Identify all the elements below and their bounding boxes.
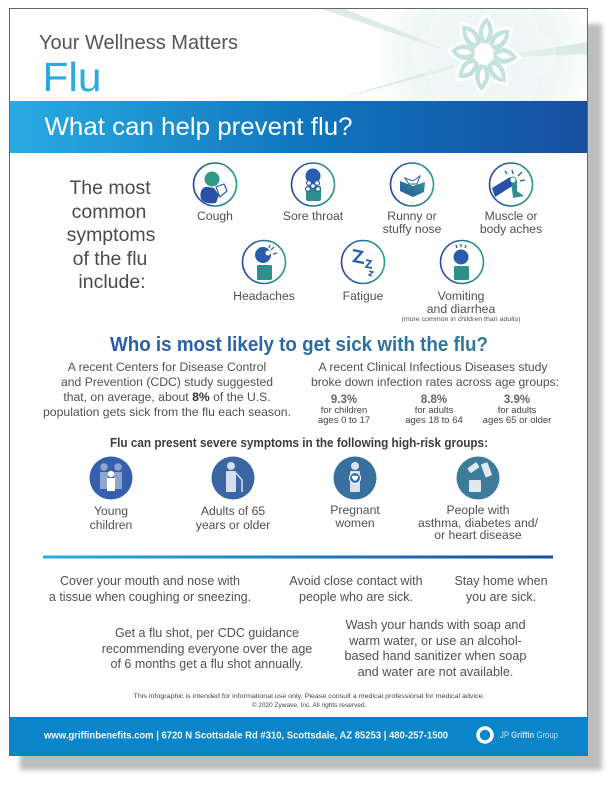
footer band	[10, 717, 587, 755]
label: chronic conditions: People with	[446, 503, 510, 517]
tip: flu shot: Get a flu shot, per CDC guidance	[115, 626, 299, 640]
label: vomiting	[402, 289, 520, 323]
text block: CDC study: A recent Centers for Disease Control	[68, 360, 266, 374]
label: muscle aches: Muscle or	[485, 209, 537, 223]
tip: wash hands: based hand sanitizer when soap	[345, 649, 526, 663]
symptoms intro text: common	[72, 201, 146, 223]
stat: adults 65 or older: ages 65 or older	[483, 415, 551, 426]
label: young children: children	[90, 518, 132, 532]
label: headaches: Headaches	[233, 289, 295, 303]
tip: wash hands: and water are not available.	[358, 665, 513, 679]
label: young children	[90, 504, 132, 532]
text block: CDC study: and Prevention (CDC) study suggested	[61, 375, 273, 389]
tip: cover mouth	[49, 574, 251, 604]
main title: Flu	[42, 54, 102, 100]
label: older adults	[196, 504, 270, 532]
label: chronic conditions: asthma, diabetes and/	[418, 516, 539, 530]
label: older adults: years or older	[196, 518, 270, 532]
text block: infection rates: A recent Clinical Infectious Diseases study	[319, 360, 548, 374]
banner: prevention heading: What can help prevent flu?	[44, 113, 352, 141]
text block: CDC study: that, on average, about 8% of the U.S.	[63, 390, 271, 404]
label: chronic conditions	[418, 503, 539, 542]
label: pregnant women: Pregnant	[330, 503, 380, 517]
label: vomiting: (more common in children than adults)	[402, 316, 520, 323]
label: pregnant women	[330, 503, 380, 530]
label: sore throat: Sore throat	[283, 209, 344, 223]
tip: avoid contact: Avoid close contact with	[289, 574, 423, 588]
stat: adults 18 to 64	[405, 394, 463, 426]
label: pregnant women: women	[334, 516, 375, 530]
label: older adults: Adults of 65	[201, 504, 265, 518]
tip: flu shot: of 6 months get a flu shot annually.	[111, 657, 303, 671]
symptoms intro text: symptoms	[67, 224, 156, 246]
label: fatigue: Fatigue	[343, 289, 384, 303]
tip: cover mouth: a tissue when coughing or sneezing.	[49, 590, 251, 604]
logo: JP Griffin Group	[478, 728, 558, 742]
icon: pregnant women	[334, 456, 376, 500]
symptoms intro text	[67, 177, 156, 293]
icon: young children	[90, 456, 132, 500]
label: chronic conditions: or heart disease	[434, 528, 522, 542]
tip: flu shot	[102, 626, 312, 671]
tip: flu shot: recommending everyone over the age	[102, 642, 312, 656]
icon: headaches	[242, 240, 286, 284]
contact details: www.griffinbenefits.com | 6720 N Scottsdale Rd #310, Scottsdale, AZ 85253 | 480-257-1500	[43, 730, 448, 742]
stat: children: for children	[321, 404, 367, 415]
icon: muscle aches	[490, 163, 532, 206]
tip: stay home	[454, 574, 548, 604]
icon: vomiting	[440, 240, 484, 284]
stat: adults 18 to 64: 8.8%	[421, 394, 447, 406]
label: vomiting: and diarrhea	[427, 302, 495, 316]
symptoms intro text: include:	[78, 271, 146, 293]
stat: adults 18 to 64: ages 18 to 64	[405, 415, 463, 426]
tip: wash hands: warm water, or use an alcohol-	[348, 634, 522, 648]
decorative flower header art	[322, 9, 587, 101]
symptoms intro text: of the flu	[73, 248, 147, 270]
stat: adults 65 or older: 3.9%	[504, 394, 530, 406]
text block: infection rates	[311, 360, 559, 389]
label: runny nose: Runny or	[387, 209, 437, 223]
heading: who is most likely: Who is most likely to get sick with the flu?	[110, 334, 488, 356]
tip: avoid contact	[289, 574, 423, 604]
disclaimer: This infographic is intended for informational use only. Please consult a medical professional for medical advice.	[134, 693, 485, 700]
icon: fatigue	[342, 240, 384, 284]
text block: infection rates: broke down infection rates across age groups:	[311, 375, 559, 389]
icon: cough	[194, 163, 236, 206]
tip: stay home: Stay home when	[454, 574, 548, 588]
stat: children: 9.3%	[331, 394, 357, 406]
text block: CDC study: population gets sick from the flu each season.	[43, 405, 291, 419]
label: runny nose: stuffy nose	[383, 222, 442, 236]
label: muscle aches	[480, 209, 542, 236]
logo: JP Griffin Group: JP Griffin Group	[500, 730, 558, 741]
icon: sore throat	[292, 163, 334, 206]
disclaimer	[134, 693, 485, 709]
disclaimer: © 2020 Zywave, Inc. All rights reserved.	[252, 701, 366, 709]
tip: wash hands	[345, 618, 526, 679]
symptoms intro text: The most	[69, 177, 151, 199]
label: vomiting: Vomiting	[438, 289, 484, 303]
label: young children: Young	[94, 504, 128, 518]
label: muscle aches: body aches	[480, 222, 542, 236]
text block: CDC study	[43, 360, 291, 419]
label: runny nose	[383, 209, 442, 236]
subheading: high-risk groups: Flu can present severe symptoms in the following high-risk groups:	[110, 436, 488, 450]
stat: adults 65 or older: for adults	[498, 404, 537, 415]
banner: prevention heading	[10, 101, 587, 153]
stat: children	[318, 394, 370, 426]
tip: avoid contact: people who are sick.	[299, 590, 413, 604]
label: cough: Cough	[197, 209, 233, 223]
stat: adults 18 to 64: for adults	[415, 404, 454, 415]
tip: cover mouth: Cover your mouth and nose with	[60, 574, 240, 588]
icon: chronic conditions	[456, 456, 500, 500]
stat: adults 65 or older	[483, 394, 551, 426]
icon: runny nose	[390, 163, 434, 206]
icon: older adults	[212, 456, 254, 500]
tip: wash hands: Wash your hands with soap and	[345, 618, 526, 632]
tip: stay home: you are sick.	[466, 590, 536, 604]
series title: Your Wellness Matters	[39, 31, 238, 54]
divider	[43, 556, 553, 558]
stat: children: ages 0 to 17	[318, 415, 370, 426]
